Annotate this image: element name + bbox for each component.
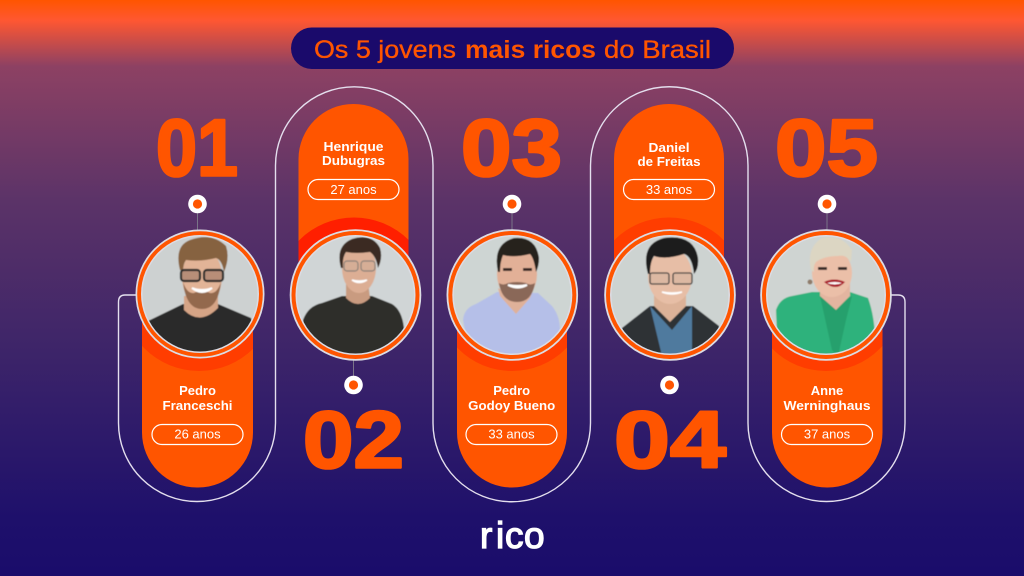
entry 1: Pedro Franceschi bbox=[136, 194, 264, 488]
serpentine connector line bbox=[118, 87, 905, 502]
name panel 5 bbox=[772, 328, 882, 488]
entry 2: Henrique Dubugras bbox=[290, 104, 422, 394]
number 03: 03 bbox=[461, 104, 562, 194]
name panel 2: 27 anos bbox=[330, 182, 377, 197]
name panel 5: Werninghaus bbox=[784, 398, 870, 413]
number 01: 01 bbox=[156, 104, 238, 194]
name panel 3 bbox=[457, 330, 567, 488]
name panel 1: Pedro bbox=[179, 383, 216, 398]
name panel 2 bbox=[298, 104, 408, 262]
number 02: 02 bbox=[303, 396, 404, 486]
portrait 3 bbox=[446, 229, 578, 361]
title banner: Os 5 jovens bbox=[314, 36, 456, 64]
title banner: mais ricos bbox=[465, 36, 596, 64]
name panel 3: 33 anos bbox=[488, 426, 535, 442]
name panel 1: 26 anos bbox=[174, 426, 221, 442]
portrait 2 bbox=[290, 229, 421, 361]
dot marker 3 bbox=[503, 195, 521, 232]
dot marker 4 bbox=[660, 376, 679, 394]
dot marker 1 bbox=[188, 195, 207, 232]
name panel 4 bbox=[614, 104, 724, 260]
dot marker 2 bbox=[344, 360, 363, 394]
title banner bbox=[291, 28, 734, 69]
name panel 2: Henrique bbox=[324, 139, 384, 154]
name panel 3: Godoy Bueno bbox=[468, 398, 555, 413]
name panel 1: Franceschi bbox=[162, 398, 232, 413]
name panel 4: de Freitas bbox=[638, 154, 700, 169]
name panel 5: Anne bbox=[811, 383, 843, 398]
rico logo: rico bbox=[480, 515, 545, 556]
name panel 4: 33 anos bbox=[646, 182, 693, 197]
name panel 3: Pedro bbox=[493, 383, 530, 398]
entry 4: Daniel de Freitas bbox=[604, 104, 736, 394]
dot marker 5 bbox=[818, 195, 836, 232]
portrait 5 bbox=[760, 229, 892, 361]
name panel 5: 37 anos bbox=[804, 426, 851, 442]
portrait 1 bbox=[136, 230, 264, 358]
portrait 4 bbox=[604, 229, 736, 361]
number 05: 05 bbox=[775, 104, 878, 194]
name panel 4: Daniel bbox=[648, 140, 690, 155]
entry 3: Pedro Godoy Bueno bbox=[446, 194, 578, 488]
name panel 2: Dubugras bbox=[322, 153, 385, 168]
number 04: 04 bbox=[614, 396, 726, 486]
entry 5: Anne Werninghaus bbox=[760, 194, 892, 488]
title banner: do Brasil bbox=[604, 36, 711, 64]
name panel 1 bbox=[142, 322, 253, 488]
